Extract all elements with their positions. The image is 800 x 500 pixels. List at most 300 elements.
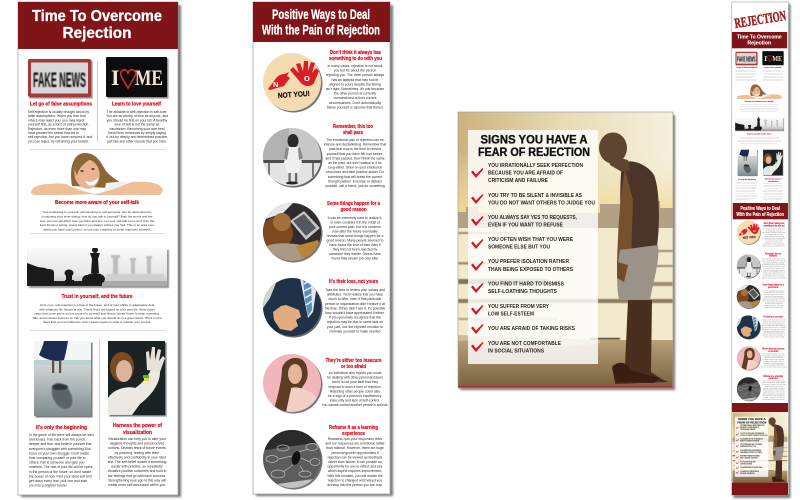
section: Positive Ways miniature: In many cases, rejection is not about — [763, 227, 785, 230]
text: don't think: the other person is currently — [334, 92, 376, 96]
heading banner: Rejection — [62, 25, 132, 42]
heading: reframe: Reframe it as a learning — [329, 425, 378, 431]
section: Time To Overcome Rejection miniature: Time To Overcome — [737, 35, 782, 41]
text: beginning: focus on your own struggle. Don't waste — [29, 451, 89, 455]
section: Time To Overcome Rejection miniature: Strengthening your ego in this way will — [763, 196, 784, 199]
section: Positive Ways miniature: Rejecting other people could also — [764, 360, 784, 363]
image: I love me: I — [111, 65, 120, 90]
section: Signs poster miniature: YOU TRY TO BE SILENT & INVISIBLE AS — [740, 432, 764, 435]
text: some things: found their dream job only after — [332, 256, 379, 260]
text: some things: your current pain, but it is common — [329, 225, 381, 229]
section: Positive Ways miniature: someone they earlier. Others have — [764, 304, 784, 307]
section: Positive Ways miniature: as the past, but don't wallow in it for — [763, 267, 785, 270]
section: Time To Overcome Rejection miniature: self-rejection, but you have nurtured it, and — [735, 77, 758, 80]
section: Time To Overcome Rejection miniature: first. The self-belief makes it something — [763, 190, 783, 193]
section: Time To Overcome Rejection miniature: In the game of life there will always be wins — [736, 181, 758, 184]
section: Positive Ways miniature: much to offer, even if that particular — [763, 322, 785, 325]
heading: visualization: Harness the power of — [113, 423, 162, 429]
text: self-talk: Your endearing to yourself, self-assuring or self-accusing, can be determined by — [42, 210, 152, 214]
section: Signs poster miniature: SELF-LOATHING THOUGHTS — [740, 457, 758, 460]
text: their loss: attributes. You'll realize that you have — [327, 293, 383, 297]
text: reframe: opportunity for you to reflect and see — [327, 465, 383, 469]
checklist text: YOU OFTEN WISH THAT YOU WERE — [488, 237, 574, 243]
section: Time To Overcome Rejection miniature: you should be first on your list. A healthy — [763, 71, 784, 74]
heading: reframe — [329, 425, 378, 437]
section: Time To Overcome Rejection miniature: with whatever life throws at you. These fears are based on your past life. Write down — [739, 137, 779, 140]
section: Time To Overcome Rejection miniature: just like any other muscle that you train. — [762, 79, 784, 82]
section: Signs poster miniature: EVEN IF YOU WANT TO REFUSE — [740, 440, 759, 443]
section: Positive Ways miniature: An individual who rejects you could — [763, 352, 785, 355]
section: Positive Ways miniature: aligned to yours despite the timing — [764, 235, 784, 238]
heading: false assumptions: Let go of false assumptions — [30, 102, 92, 108]
text: remember: intense and destabilizing. Remember that — [324, 143, 386, 147]
section: Positive Ways miniature: Take the time to review your values and — [762, 319, 786, 322]
section: Positive Ways miniature — [733, 203, 788, 402]
text: some things: someone they earlier. Others have — [329, 252, 381, 256]
checklist text: LOW SELF-ESTEEM — [488, 312, 534, 318]
section: Positive Ways miniature: or too afraid — [768, 350, 779, 353]
translucent list box — [468, 130, 598, 364]
text: their loss: motivate yourself to make needed — [330, 329, 381, 333]
section: Positive Ways miniature: your part, use the rejected emotion to — [763, 334, 785, 337]
section: Positive Ways miniature: rejection is changed and helped you — [763, 396, 785, 399]
text: false assumptions: Rejection, as even more than one may — [28, 127, 86, 131]
text: false assumptions: false assumptions. When you fear that — [28, 114, 86, 118]
checklist text: YOU SUFFER FROM VERY — [488, 304, 550, 310]
section: Signs poster miniature: CRITICISM AND FAILURE — [740, 428, 756, 431]
text: false assumptions: yourself first, as a form of self-protection. — [28, 123, 89, 127]
section: Positive Ways miniature: resources and take positive action. Do — [762, 271, 786, 274]
text: remember: yourself, call a friend, just do something — [325, 184, 385, 188]
text: their loss: Take the time to review your values and — [325, 288, 385, 292]
section: Time To Overcome Rejection miniature: you can reject, by reframing your beliefs. — [735, 79, 757, 82]
section: Time To Overcome Rejection miniature: Harness the power of — [765, 177, 782, 180]
section: Time To Overcome Rejection miniature: everyone's struggles with something. But — [736, 185, 757, 188]
text: don't think: circumstances. Don't automatically — [329, 101, 381, 105]
panel: Time To Overcome Rejection — [18, 2, 181, 497]
section: Signs poster miniature: YOU PREFER ISOLATION RATHER — [740, 449, 761, 452]
checklist text: YOU FIND IT HARD TO DISMISS — [488, 282, 565, 288]
section: Time To Overcome Rejection miniature: Rejection — [747, 40, 771, 46]
heading: love yourself: Learn to love yourself — [112, 102, 161, 108]
section: Time To Overcome Rejection miniature: Self-rejection is usually brought about by — [735, 69, 757, 72]
section: Time To Overcome Rejection miniature: Learn to love yourself — [764, 66, 782, 69]
section: Positive Ways miniature: intense and destabilizing. Remember that — [761, 259, 787, 262]
text: future: Talk, and envision success so that you know what you should do in a given future. Work on the — [32, 316, 162, 320]
text: some things: have found the love of their lives if — [329, 243, 381, 247]
section: Positive Ways miniature: than rational. However, there are huge — [762, 383, 786, 386]
text: love yourself: love of self is not the same as — [115, 123, 160, 127]
text: false assumptions: Self-rejection is usually brought about by — [28, 110, 89, 114]
text: visualization: Strengthening your ego in this way will — [108, 478, 166, 482]
section: Time To Overcome Rejection miniature: by picturing, feeling with them — [765, 187, 781, 190]
section: Time To Overcome Rejection miniature: steps that come prove you've proved to yourself that history doesn't have to keep repeating. — [738, 138, 781, 141]
text: remember: and it has passed. Don't think the same — [325, 156, 385, 160]
text: beginning: others. Fail is someone and gets you — [29, 461, 85, 465]
section: Positive Ways miniature: long either. Draw on your emotional — [763, 269, 785, 272]
checklist text: BECAUSE YOU ARE AFRAID OF — [488, 170, 563, 176]
text: don't think: has an agenda that may not be — [332, 78, 378, 82]
text: visualization: create more self-assurance within you. — [108, 483, 166, 487]
image: mind map keyboard circle — [263, 430, 322, 490]
heading banner — [253, 2, 390, 42]
image: woman raising hand — [108, 341, 166, 416]
section: Positive Ways miniature: attributes. You'll realize that you have — [763, 320, 785, 324]
section: Positive Ways miniature: the time. If they didn't see it, it's possible — [762, 326, 786, 329]
section: Positive Ways miniature: experience — [769, 377, 778, 380]
text: love yourself: friend then reinforced by simply saying — [108, 131, 166, 135]
heading: visualization line two: visualization — [123, 430, 152, 436]
image: I love me: ME — [135, 65, 163, 90]
section: Positive Ways miniature: something that will break the current — [763, 273, 785, 276]
section: Positive Ways miniature: You cannot control another person's actions. — [761, 366, 788, 369]
heading: remember: Remember, this too — [333, 124, 373, 130]
text: reframe: than rational. However, there are huge — [326, 446, 384, 450]
section: Signs poster miniature: SOMEONE ELSE BUT YOU — [740, 446, 756, 448]
section: Time To Overcome Rejection miniature: love of self is not the same as — [765, 73, 781, 76]
text: visualization: the feelings that go with each success. — [108, 474, 166, 478]
text: some things: they first not been rejected by — [333, 248, 378, 252]
section: Positive Ways miniature: The emotional pain of rejection can be — [762, 258, 786, 261]
text: beginning: nowhere. The rest of your life will be spent — [29, 465, 93, 469]
section: Positive Ways miniature: be dealing with other personal issues — [763, 354, 785, 357]
icon: not you circle: N — [273, 80, 278, 89]
section: Time To Overcome Rejection miniature: effectively and confidently in your mind — [763, 188, 783, 191]
section: Time To Overcome Rejection miniature: Talk, and envision success so that you know what you should do in a given future. Work on the — [737, 140, 782, 143]
text: their loss: much to offer, even if that particular — [329, 297, 382, 301]
section: Signs poster miniature: IN SOCIAL SITUATIONS — [740, 472, 755, 475]
text: their loss: the time. If they didn't see it, it's possible — [325, 306, 385, 310]
checklist text: SOMEONE ELSE BUT YOU — [488, 244, 550, 250]
section: Signs poster miniature: YOU FIND IT HARD TO DISMISS — [740, 455, 760, 458]
section: Time To Overcome Rejection miniature: it, but by deeply and determined practice, — [763, 77, 784, 80]
section: Time To Overcome Rejection miniature: you into a brighter future! — [736, 198, 749, 201]
section: Time To Overcome Rejection miniature: Become more aware of your self-talk — [745, 100, 775, 103]
section: Positive Ways miniature: isn't right. Sometimes, it's just because — [762, 237, 786, 240]
section: Positive Ways miniature: the other person is currently — [765, 239, 783, 242]
text: don't think: overwhelmed at their current — [334, 96, 377, 100]
heading: reframe: experience — [342, 431, 365, 437]
text: their loss: rejection may be due to some lack on — [327, 320, 383, 324]
section: Signs poster miniature: YOU IRRATIONALLY SEEK PERFECTION — [740, 424, 764, 427]
section: Positive Ways miniature: Reframe it as a learning — [763, 375, 784, 378]
text: love yourself: just like any other muscle that you train. — [106, 139, 167, 143]
section: Positive Ways miniature: reveals that some things happen for a — [763, 297, 785, 300]
section: Signs poster miniature: FEAR OF REJECTION — [738, 420, 766, 424]
heading: remember: shall pass — [343, 130, 363, 136]
section: Time To Overcome Rejection miniature: the power of now. Find your ideal self and — [736, 195, 757, 198]
section: Positive Ways miniature: good reason — [768, 286, 779, 289]
section: Time To Overcome Rejection miniature: Trust in yourself, and the future — [747, 133, 772, 136]
text: too insecure: be dealing with other personal issues — [327, 376, 383, 380]
section: Time To Overcome Rejection miniature: get down every fear, pick one and start — [736, 197, 756, 200]
text: don't think: rejecting you. The other person always — [326, 73, 384, 77]
section: Positive Ways miniature: rather than failure. It can provide an — [763, 389, 785, 392]
section: Signs poster miniature: LOW SELF-ESTEEM — [740, 463, 752, 465]
text: reframe: develop into the person you are now. — [327, 483, 383, 487]
section: Positive Ways miniature: If you genuinely recognize that the — [764, 330, 784, 333]
text: love yourself: you should be first on your list. A healthy — [107, 118, 168, 122]
section: Time To Overcome Rejection miniature: notions, Dismiss fears of future events — [763, 185, 783, 188]
text: visualization: easier with practice, so repeatedly — [111, 465, 163, 469]
section: Time To Overcome Rejection miniature: fears that you can influence. Don't waste regret on what is outside your control. — [741, 141, 778, 144]
heading: some things — [327, 201, 381, 213]
section: Positive Ways miniature: your current pain, but it is common — [763, 293, 784, 296]
text: beginning: everyone's struggles with something. But — [29, 447, 91, 451]
image: sad woman circle — [263, 128, 322, 188]
text: beginning: get down every fear, pick one and start — [29, 479, 87, 483]
heading: some things: good reason — [340, 207, 367, 213]
checklist text: EVEN IF YOU WANT TO REFUSE — [488, 222, 564, 228]
text: self-talk: best friend or caring, loving parent you always wished you had. This is an area over — [40, 223, 154, 227]
section: Positive Ways miniature: With this mindset, you will realize the — [763, 394, 785, 397]
section: Positive Ways miniature: circumstances. Don't automatically — [763, 242, 785, 245]
text: future: with whatever life throws at you. These fears are based on your past life. Write down — [39, 307, 155, 311]
section: Positive Ways miniature: They're either too insecure — [762, 348, 785, 351]
section: Positive Ways miniature: rejecting you. The other person always — [762, 231, 786, 234]
text: reframe: rejection can be viewed as feedback — [328, 455, 383, 459]
section: Time To Overcome Rejection miniature: and losses, Fall, back from the punch, — [736, 182, 756, 185]
text: reframe: and our responses are emotional rather — [325, 442, 386, 446]
section: Positive Ways miniature: be a sign of a person's insufficiency, — [763, 363, 785, 365]
checklist text: CRITICISM AND FAILURE — [488, 178, 549, 184]
heading: don't think: something to do with you — [329, 56, 382, 62]
text: self-talk: which you have total control, so use your creativity to foster improved yourself. — [43, 228, 151, 232]
section: Positive Ways miniature: opportunity for you to reflect and see — [763, 391, 785, 394]
heading: too insecure — [326, 358, 382, 370]
text: remember: yourself that you have felt hurt before, — [327, 152, 384, 156]
section: Positive Ways miniature: It's their loss, not yours — [763, 315, 784, 318]
section: Positive Ways miniature: develop into the person you are now. — [763, 398, 786, 401]
section: Time To Overcome Rejection miniature: nowhere. The rest of your life will be spent — [736, 192, 758, 195]
text: future: steps that come prove you've proved to yourself that history doesn't have to keep repeating. — [34, 312, 160, 316]
section: Positive Ways miniature: and it is not your fault that they — [765, 356, 783, 359]
text: some things: It can be extremely hard to realize it, — [328, 216, 382, 220]
heading: too insecure: They're either too insecure — [326, 358, 382, 364]
section: Time To Overcome Rejection miniature: which you have total control, so use your creativity to foster improved yourself. — [741, 109, 778, 112]
section: Positive Ways miniature: or even consider it in the midst of — [764, 291, 784, 294]
section: Positive Ways miniature: Remember, this too — [765, 252, 782, 255]
checklist text: YOU TRY TO BE SILENT & INVISIBLE AS — [488, 193, 583, 199]
checklist text: YOU IRRATIONALLY SEEK PERFECTION — [488, 163, 583, 169]
section: Positive Ways miniature: insecurity and lack of self-control. — [764, 364, 784, 367]
section: Time To Overcome Rejection miniature: The antidote to self-rejection is self-love. — [763, 69, 784, 72]
heading banner: Time To Overcome — [32, 8, 162, 25]
section: Time To Overcome Rejection miniature: focus on your own struggle. Don't waste — [736, 187, 757, 190]
section: Time To Overcome Rejection miniature: negative thoughts and preconceived — [764, 184, 783, 187]
text: don't think: aligned to yours despite the timing — [329, 82, 381, 86]
photo: man on beach — [458, 112, 673, 388]
section: Positive Ways miniature: have found the love of their lives if — [764, 300, 785, 303]
text: reframe: which aspect requires improvement. — [328, 469, 382, 473]
section: Positive Ways miniature: motivate yourself to make needed — [764, 335, 784, 338]
text: false assumptions: others may reject you, you may reject — [28, 118, 84, 122]
text: reframe: personal growth opportunities if — [331, 451, 379, 455]
text: don't think: blame yourself or assume that there's — [327, 105, 384, 109]
section: Signs poster miniature: YOU OFTEN WISH THAT YOU WERE — [740, 443, 762, 446]
section: Time To Overcome Rejection miniature: false assumptions. When you fear that — [735, 70, 756, 73]
section: Time To Overcome Rejection miniature — [732, 32, 787, 201]
text: visualization: by picturing, feeling with them — [115, 451, 160, 455]
heading banner: Positive Ways to Deal — [272, 6, 370, 22]
section: Signs poster miniature — [732, 412, 788, 483]
heading: too insecure: or too afraid — [341, 364, 366, 370]
section: Positive Ways miniature: good reason. Many people seemed to — [763, 298, 785, 301]
checkmarks — [471, 168, 484, 352]
text: false assumptions: have planted the seeds that led to — [28, 131, 79, 135]
text: beginning: you into a brighter future! — [29, 484, 67, 488]
text: self-talk: monitoring your inner dialog: how do you talk to yourself? Both the words and the — [42, 214, 153, 218]
checklist text: YOU ARE AFRAID OF TAKING RISKS — [488, 326, 576, 332]
checklist text: SELF-LOATHING THOUGHTS — [488, 289, 558, 295]
text: don't think: isn't right. Sometimes, it's just because — [326, 87, 384, 91]
text: future: At its core, self-rejection is a fear of the future, and of your ability to adequately deal — [40, 303, 154, 307]
image: fake news — [28, 59, 92, 98]
section: Positive Ways miniature: yourself, call a friend, just do something — [762, 276, 786, 279]
text: their loss: your part, use the rejected emotion to — [327, 325, 383, 329]
text: self-talk: tone you use will affect how you think and feel. Let your self-talk come as if from the — [40, 219, 155, 223]
section: Time To Overcome Rejection miniature: visualization — [768, 180, 779, 183]
section: Time To Overcome Rejection miniature: narcissism. Becoming your own best — [764, 74, 783, 77]
section: Positive Ways miniature: past fear now is the time to remind — [764, 261, 784, 264]
section: Time To Overcome Rejection miniature: deeper and fear, and believe yourself that — [736, 184, 758, 187]
text: their loss: person or organization didn't realize it at — [325, 302, 385, 306]
text: reframe: rather than failure. It can provide an — [328, 460, 382, 464]
section: Positive Ways miniature: you but it's about the person — [765, 229, 783, 232]
text: visualization: effectively and confidently in your mind — [108, 455, 166, 459]
section: Positive Ways miniature: found their dream job only after — [764, 306, 784, 309]
section: Time To Overcome Rejection miniature: the feelings that go with each success. — [763, 195, 784, 198]
checklist text: YOU DO NOT WANT OTHERS TO JUDGE YOU — [488, 200, 595, 206]
section: Time To Overcome Rejection miniature: others. Fail is someone and gets you — [736, 190, 755, 193]
text: visualization: first. The self-belief makes it something — [108, 460, 166, 464]
image: insecure woman circle — [263, 354, 322, 414]
icon: not you circle: O — [304, 74, 310, 83]
checklist text: YOU ALWAYS SAY YES TO REQUESTS, — [488, 215, 578, 221]
section: Positive Ways miniature: they wouldn't have appreciated it either. — [762, 328, 786, 331]
panel: Time To Overcome Rejection: FAKE NEWS — [33, 69, 86, 92]
text: some things: reveals that some things happen for a — [327, 234, 383, 238]
panel: Signs You Have a Fear of Rejection poster — [458, 112, 675, 390]
heading: beginning: It's only the beginning — [36, 425, 87, 431]
section: Signs poster miniature: YOU ARE AFRAID OF TAKING RISKS — [740, 466, 763, 469]
section: Signs poster miniature: SIGNS YOU HAVE A — [738, 417, 766, 421]
checklist text: YOU PREFER ISOLATION RATHER — [488, 259, 569, 265]
section: Signs poster miniature: THAN BEING EXPOSED TO OTHERS — [740, 451, 762, 454]
heading: self-talk: Become more aware of your self-talk — [55, 200, 140, 206]
text: too insecure: An individual who rejects you could — [329, 371, 381, 375]
text: love yourself: You are as worthy of love as anyone, and — [106, 114, 168, 118]
image: woman leaning on banner — [31, 153, 163, 195]
image: I love me — [106, 57, 168, 98]
section: Time To Overcome Rejection miniature: have planted the seeds that led to — [735, 76, 753, 79]
section: Positive Ways miniature: something to do with you — [763, 225, 785, 228]
section: Positive Ways miniature: and our responses are emotional rather — [762, 381, 786, 384]
text: too insecure: Rejecting other people could also — [330, 389, 380, 393]
text: visualization: negative thoughts and preconceived — [110, 442, 164, 446]
section: Time To Overcome Rejection miniature: At its core, self-rejection is a fear of the future, and of your ability to adequately deal — [740, 135, 780, 138]
section: Positive Ways miniature: personal growth opportunities if — [764, 385, 784, 388]
heading: remember — [333, 124, 373, 136]
section: Time To Overcome Rejection miniature: Let go of false assumptions — [736, 66, 758, 69]
title: FEAR OF REJECTION — [478, 147, 590, 159]
image: footprint on beach — [34, 341, 92, 418]
text: some things: or even consider it in the midst of — [330, 220, 380, 224]
text: reframe: rejection is changed and helped you — [328, 478, 382, 482]
image: laptop circle — [261, 203, 322, 262]
text: too insecure: and it is not your fault that they — [332, 380, 378, 384]
icon: not you circle: NOT YOU! — [278, 89, 310, 100]
section: Positive Ways miniature: they first not been rejected by — [765, 302, 783, 305]
section: Time To Overcome Rejection miniature: monitoring your inner dialog: how do you talk to yourself? Both the words and the — [740, 105, 779, 108]
section: Time To Overcome Rejection miniature: friend then reinforced by simply saying — [763, 76, 783, 79]
checklist text: THAN BEING EXPOSED TO OTHERS — [488, 267, 574, 273]
text: remember: past fear now is the time to remind — [329, 147, 381, 151]
text: too insecure: insecurity and lack of self-control. — [330, 399, 380, 403]
section: Positive Ways miniature: shall pass — [769, 256, 778, 258]
text: too insecure: You cannot control another person's actions. — [322, 403, 388, 407]
title: SIGNS YOU HAVE A — [480, 134, 588, 146]
section: Signs poster miniature: BECAUSE YOU ARE AFRAID OF — [740, 426, 759, 429]
section: Time To Overcome Rejection miniature: tone you use will affect how you think and feel. Let your self-talk come as if from the — [740, 106, 779, 109]
section: Positive Ways miniature: Don't think it always has — [764, 222, 785, 225]
text: beginning: in the person of the future, so don't waste — [29, 470, 91, 474]
text: false assumptions: you can reject, by reframing your beliefs. — [28, 139, 89, 143]
section: Time To Overcome Rejection miniature: create more self-assurance within you. — [763, 198, 784, 201]
section: Time To Overcome Rejection miniature: in the person of the future, so don't waste — [736, 193, 757, 196]
heading banner — [18, 2, 178, 49]
section: Time To Overcome Rejection miniature: visualize positive outcomes and hold to — [763, 193, 783, 196]
image: chess pieces — [27, 247, 169, 288]
heading banner: With the Pain of Rejection — [262, 22, 380, 38]
text: remember: thought pattern. Exercise or distract — [328, 179, 382, 183]
text: remember: resources and take positive action. Do — [326, 170, 384, 174]
text: love yourself: narcissism. Becoming your own best — [109, 127, 165, 131]
section: Signs poster miniature: YOU ALWAYS SAY YES TO REQUESTS, — [740, 438, 763, 441]
section: Positive Ways miniature: has an agenda that may not be — [765, 233, 783, 236]
image: pointing businessman circle — [263, 278, 322, 338]
text: visualization: notions, Dismiss fears of future events — [108, 446, 166, 450]
heading: future: Trust in yourself, and the future — [62, 294, 132, 300]
heading: don't think — [329, 50, 382, 62]
section: Signs poster miniature: YOU DO NOT WANT OTHERS TO JUDGE YOU — [740, 434, 768, 437]
section: Time To Overcome Rejection miniature: others may reject you, you may reject — [735, 71, 755, 74]
section: Signs poster miniature: YOU SUFFER FROM VERY — [740, 461, 756, 463]
text: remember: The emotional pain of rejection can be — [326, 138, 384, 142]
panel: combined Rejection report preview — [732, 2, 790, 498]
section: Positive Ways miniature: Some things happen for a — [763, 284, 785, 287]
section: Positive Ways miniature: rejection may be due to some lack on — [763, 332, 785, 335]
text: too insecure: respond to such a form of rejection. — [328, 385, 382, 389]
section: Time To Overcome Rejection miniature: It's only the beginning — [738, 178, 757, 181]
section: Positive Ways miniature: which aspect requires improvement. — [763, 392, 785, 395]
heading: some things: Some things happen for a — [327, 201, 381, 207]
section: Time To Overcome Rejection miniature: easier with practice, so repeatedly — [764, 192, 782, 195]
section: Time To Overcome Rejection miniature: Rejection, as even more than one may — [735, 74, 756, 77]
text: remember: long either. Draw on your emotional — [328, 166, 382, 170]
text: beginning: the power of now. Find your ideal self and — [29, 474, 92, 478]
section: Positive Ways miniature: and it has passed. Don't think the same — [762, 265, 786, 268]
section: Positive Ways miniature: respond to such a form of rejection. — [763, 358, 785, 361]
text: future: fears that you can influence. Don't waste regret on what is outside your control. — [43, 320, 151, 324]
icon: not you circle — [263, 53, 322, 112]
text: remember: something that will break the current — [328, 175, 382, 179]
section: Time To Overcome Rejection miniature: best friend or caring, loving parent you always wished you had. This is an area over — [740, 108, 779, 111]
section: Positive Ways miniature: thought pattern. Exercise or distract — [763, 274, 785, 277]
text: don't think: you but it's about the person — [334, 69, 376, 73]
section: Positive Ways miniature: yourself that you have felt hurt before, — [763, 263, 786, 266]
heading: don't think: Don't think it always has — [330, 50, 381, 56]
